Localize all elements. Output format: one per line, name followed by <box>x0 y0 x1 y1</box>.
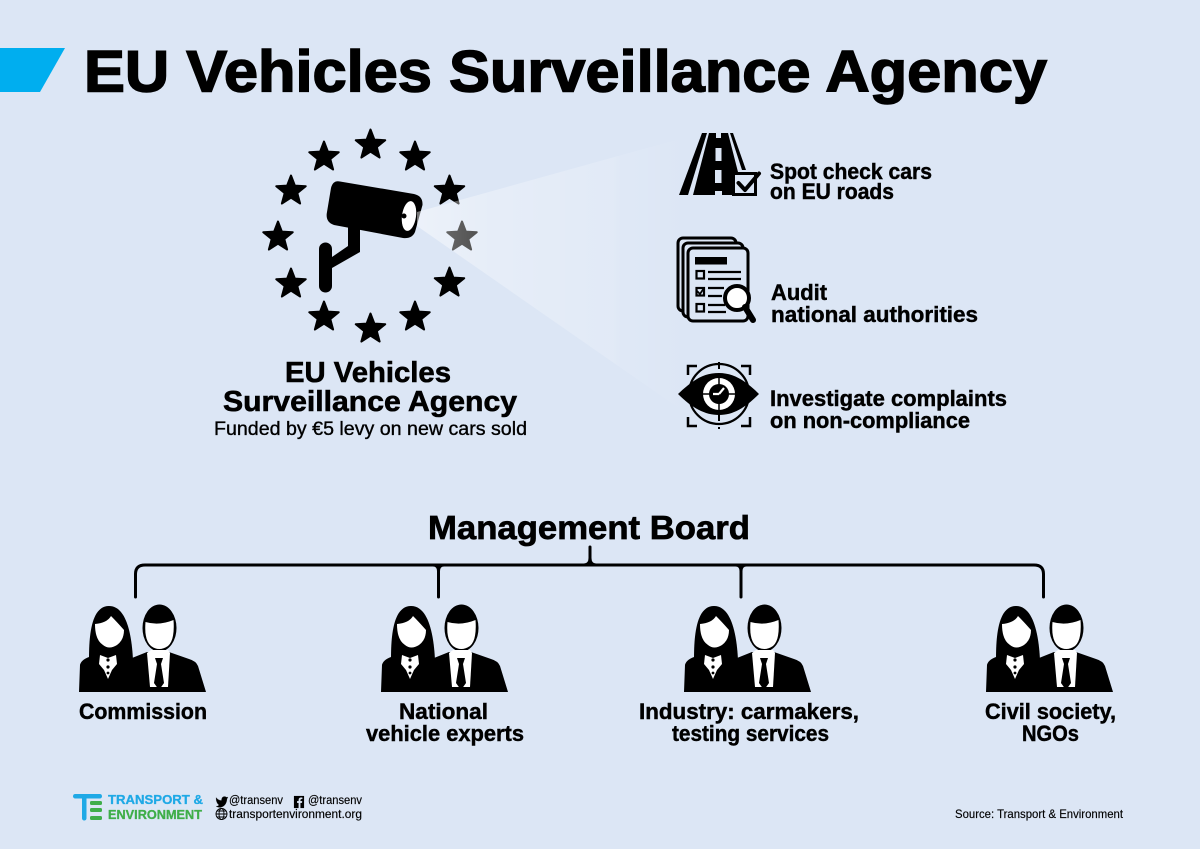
icon: commission people <box>79 604 206 692</box>
spot check text: on EU roads <box>770 179 894 204</box>
investigate text <box>770 386 1007 433</box>
label: national vehicle experts <box>366 699 524 746</box>
title accent <box>0 48 65 92</box>
logo: Transport & Environment: ENVIRONMENT <box>108 807 202 822</box>
spot check text <box>770 159 932 204</box>
label: civil society: NGOs <box>1022 721 1079 746</box>
investigate text: on non-compliance <box>770 408 970 433</box>
audit text: Audit <box>771 280 828 305</box>
org chart bracket <box>136 547 1044 597</box>
icon: industry people <box>684 604 811 692</box>
social links: @transenv <box>308 795 362 807</box>
logo: Transport & Environment: TRANSPORT & <box>108 792 203 807</box>
audit text <box>771 280 978 327</box>
icon: audit documents with magnifier <box>678 238 753 321</box>
icon: eye with target <box>678 362 759 429</box>
social links: transportenvironment.org <box>229 809 362 821</box>
label: civil society <box>985 699 1116 746</box>
label: national vehicle experts: vehicle experts <box>366 721 524 746</box>
agency name: Surveillance Agency <box>223 386 517 418</box>
label: national vehicle experts: National <box>399 699 488 724</box>
icon: twitter <box>216 796 228 808</box>
management board heading: Management Board <box>428 509 750 546</box>
title: EU Vehicles Surveillance Agency <box>84 40 1047 104</box>
label: commission: Commission <box>79 699 207 724</box>
label: industry <box>639 699 859 746</box>
icon: facebook <box>294 796 304 808</box>
spot check text: Spot check cars <box>770 159 932 184</box>
label: civil society: Civil society, <box>985 699 1116 724</box>
logo: Transport & Environment <box>73 792 203 822</box>
icon: road with checkbox <box>679 133 759 195</box>
icon: civil society people <box>986 604 1113 692</box>
icon: ring of EU stars <box>263 130 477 342</box>
label: industry: Industry: carmakers, <box>639 699 859 724</box>
audit text: national authorities <box>771 302 978 327</box>
funding note: Funded by €5 levy on new cars sold <box>214 419 527 440</box>
icon: surveillance camera <box>319 181 423 292</box>
agency name <box>223 357 517 418</box>
social links <box>216 795 362 821</box>
label: industry: testing services <box>672 721 829 746</box>
social links: @transenv <box>229 795 283 807</box>
icon: national experts people <box>381 604 508 692</box>
agency name: EU Vehicles <box>285 357 451 389</box>
camera light beam <box>417 136 690 416</box>
icon: globe <box>216 808 227 820</box>
investigate text: Investigate complaints <box>770 386 1007 411</box>
source note: Source: Transport & Environment <box>955 807 1124 821</box>
